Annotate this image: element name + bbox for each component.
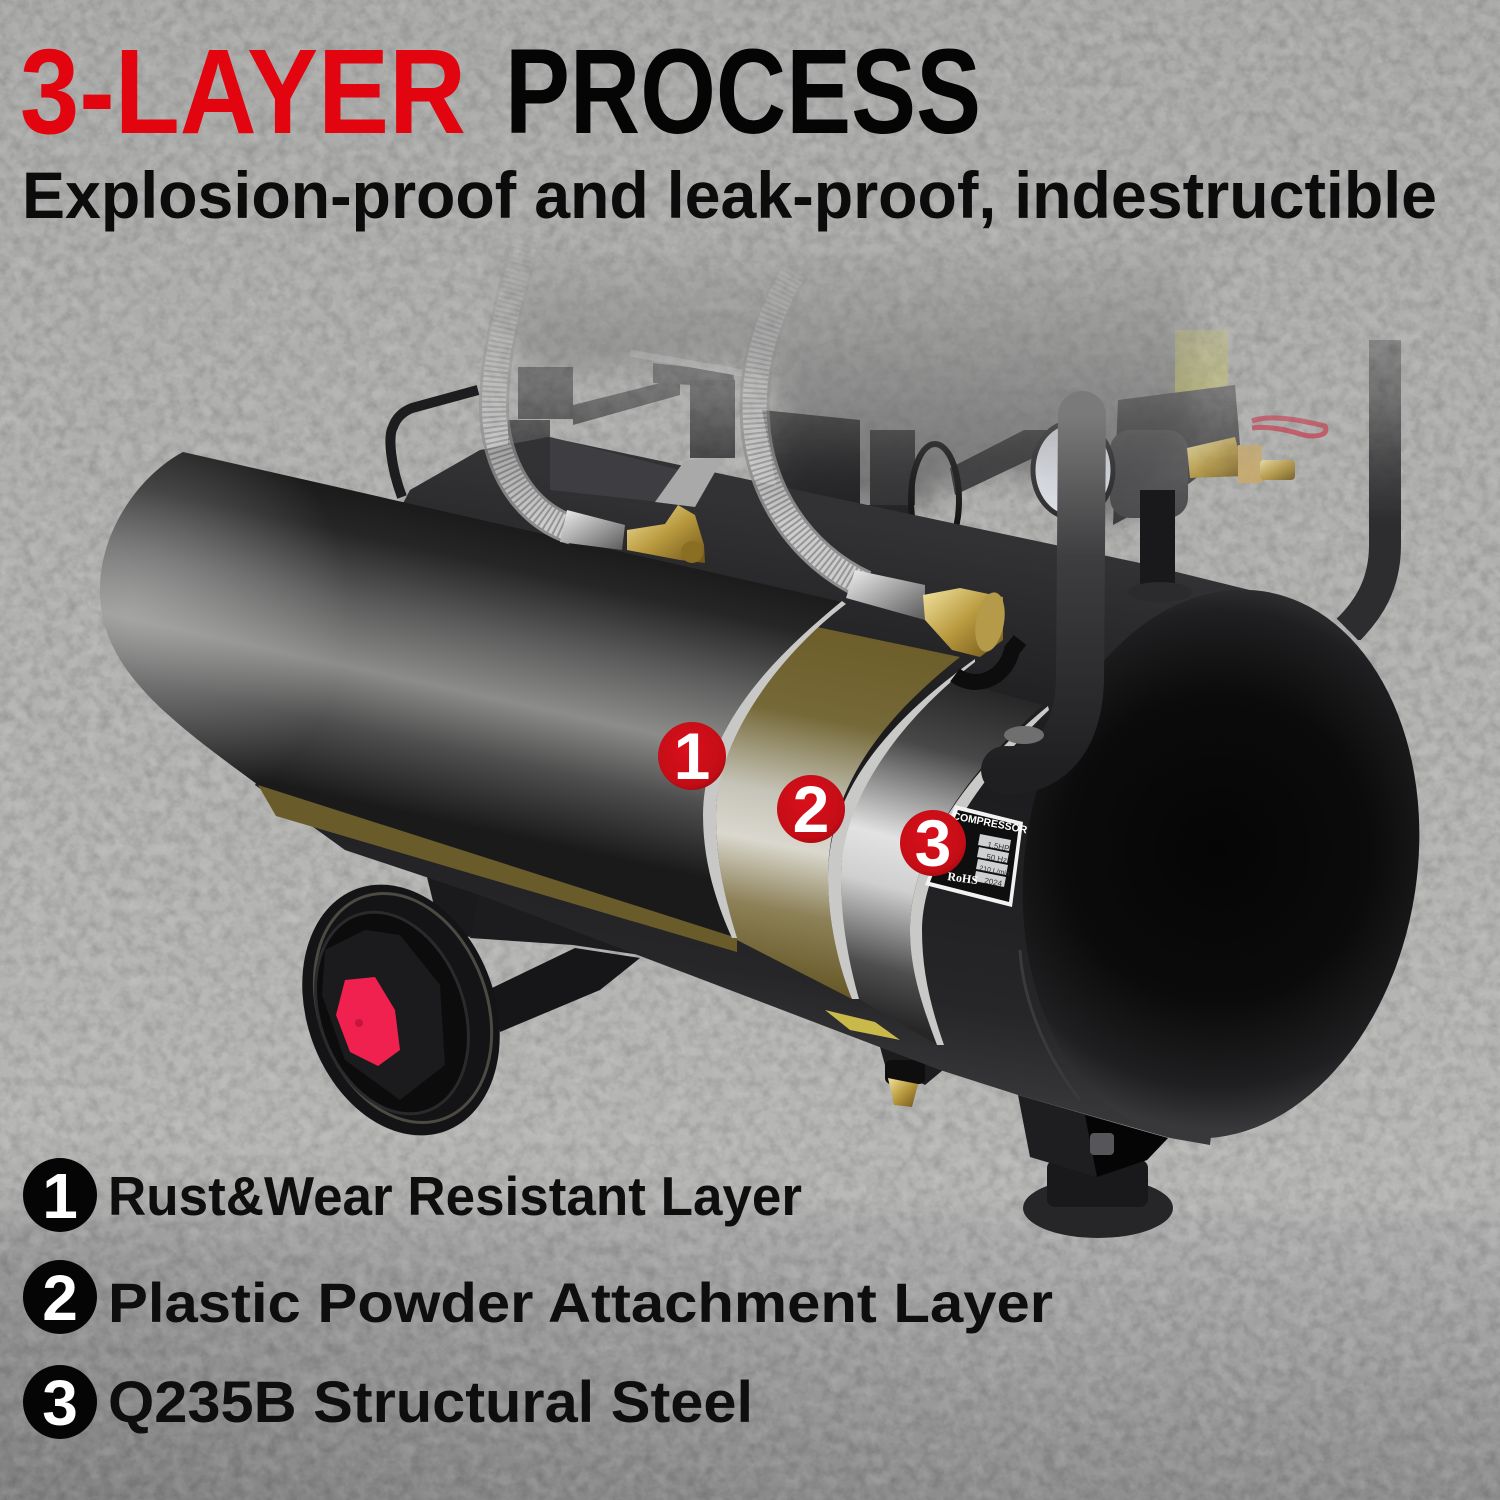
compressor rating plate bbox=[925, 805, 1029, 907]
right brass fitting bbox=[846, 570, 1009, 657]
fog haze over hidden pump bbox=[495, 250, 1195, 525]
yellow sticker edge bbox=[825, 1010, 900, 1040]
rim of layer 1 bbox=[703, 601, 846, 938]
callout 2: 2 bbox=[793, 772, 829, 846]
layer 3 band: steel bbox=[841, 680, 1043, 1045]
callout 1 bbox=[658, 719, 726, 793]
callout 2 bbox=[777, 772, 845, 846]
legend item 3: 3 bbox=[42, 1367, 78, 1439]
frame rails bbox=[508, 353, 1050, 575]
cutaway sleeve: rust and wear layer bbox=[90, 440, 860, 950]
compressor rating plate: COMPRESSOR bbox=[951, 810, 1029, 836]
faded upper machine in fog bbox=[508, 330, 1385, 630]
layer 2 band: plastic powder bbox=[716, 627, 960, 999]
right handle bbox=[1348, 340, 1385, 630]
red hub nut bbox=[336, 977, 400, 1066]
legend item 1: 1 bbox=[42, 1160, 78, 1232]
callout 3: 3 bbox=[915, 806, 951, 880]
ball valve bbox=[1187, 418, 1326, 483]
pressure gauge bbox=[1033, 422, 1113, 518]
rim of layer 2 bbox=[828, 659, 975, 999]
rear tank saddle highlight bbox=[550, 437, 700, 502]
compressor rating plate: RoHS bbox=[947, 869, 979, 887]
callout 1: 1 bbox=[674, 719, 710, 793]
legend item 2: Plastic Powder Attachment Layer bbox=[108, 1271, 1053, 1334]
title: PROCESS: PROCESS bbox=[505, 23, 981, 159]
title: 3-LAYER: 3-LAYER bbox=[20, 23, 466, 159]
compressor rating plate: 1.5HP bbox=[987, 840, 1010, 853]
weld bead at layer cut bbox=[955, 640, 1020, 682]
olive underside strip bbox=[258, 785, 737, 952]
compressor rating plate: 210 L/min bbox=[979, 865, 1010, 878]
cylinder beside gauge bbox=[1110, 430, 1188, 518]
legend item 1: Rust&Wear Resistant Layer bbox=[108, 1165, 802, 1227]
yellow warning sticker bbox=[1175, 330, 1228, 400]
callout 3 bbox=[900, 806, 966, 880]
wheel bracket bbox=[427, 877, 640, 1032]
rubber foot and bracket bbox=[1018, 1095, 1173, 1238]
wheel hub cap bbox=[322, 930, 445, 1100]
right braided hose bbox=[755, 270, 865, 585]
rim of layer 3 bbox=[910, 706, 1049, 1045]
air tank post bbox=[1128, 490, 1192, 602]
tank end cap bbox=[984, 561, 1458, 1167]
left brass fitting bbox=[560, 458, 723, 563]
subtitle: Explosion-proof and leak-proof, indestructible bbox=[22, 158, 1437, 232]
compressor rating plate: 50 Hz bbox=[986, 852, 1008, 865]
left braided hose bbox=[494, 225, 573, 530]
legend item 2: 2 bbox=[42, 1262, 78, 1334]
tank body bbox=[255, 437, 1270, 1145]
vertical support tube bbox=[1004, 415, 1082, 770]
wheel bbox=[269, 857, 533, 1163]
dark block under sticker bbox=[1113, 385, 1240, 525]
legend item 3: Q235B Structural Steel bbox=[108, 1370, 753, 1435]
thin left handle pipe bbox=[390, 390, 478, 497]
coil ring bbox=[911, 444, 959, 556]
brass drain valve bbox=[880, 1047, 943, 1107]
compressor rating plate: 2024 bbox=[984, 876, 1003, 888]
